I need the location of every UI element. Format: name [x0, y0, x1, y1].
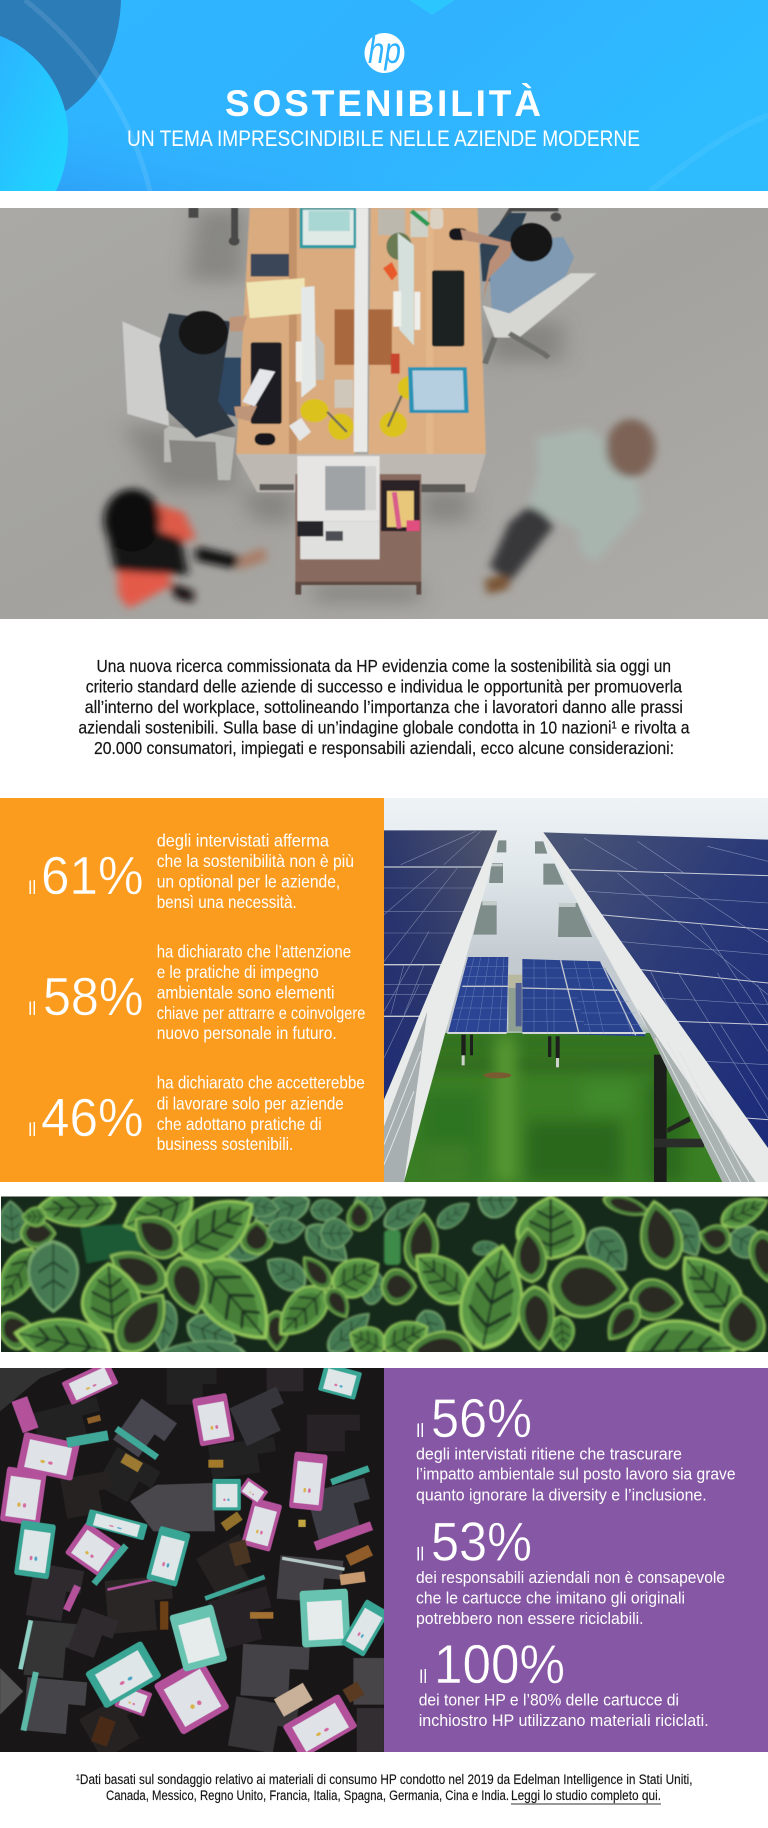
stat: 56%: quanto ignorare la diversity e l’inclusione. [416, 1485, 707, 1504]
intro paragraph: 20.000 consumatori, impiegati e responsabili aziendali, ecco alcune considerazioni: [94, 738, 674, 758]
stat: 61% [28, 830, 354, 912]
stat: 61%: 61% [41, 846, 144, 906]
intro paragraph: criterio standard delle aziende di successo e individua le opportunità per promuoverla [86, 676, 682, 696]
front-left solar panel [384, 830, 497, 1100]
black cartridge bodies [0, 1368, 384, 1760]
stat: 56%: l’impatto ambientale sul posto lavoro sia grave [416, 1465, 736, 1484]
meadow [384, 1033, 768, 1182]
photo: solar panels [384, 798, 768, 1182]
stat: 61%: degli intervistati afferma [157, 830, 329, 850]
woman bottom left [104, 489, 267, 609]
stat: 58% [28, 941, 365, 1043]
desk front [236, 454, 486, 492]
partition [354, 208, 368, 452]
stat: 100%: dei toner HP e l’80% delle cartucce di [419, 1690, 679, 1710]
stat: 56%: Il [416, 1421, 424, 1442]
stat: 56% [416, 1387, 736, 1504]
desk tops [236, 208, 355, 454]
pink cartridges [0, 1361, 373, 1759]
horizon strip [508, 975, 522, 988]
stat: 46% [28, 1073, 365, 1154]
man blurred right [485, 419, 655, 595]
header background [0, 0, 768, 191]
stat: 58%: 58% [43, 967, 144, 1027]
intro paragraph [78, 656, 690, 758]
footnote [76, 1772, 692, 1804]
subtitle: UN TEMA IMPRESCINDIBILE NELLE AZIENDE MODERNE [127, 126, 640, 151]
stat: 58%: chiave per attrarre e coinvolgere [157, 1003, 365, 1023]
rear posts [461, 1035, 560, 1058]
front-right rail and post [539, 832, 768, 1182]
leaves left half [1, 1196, 388, 1352]
photo: green leaves [1, 1196, 768, 1352]
stat: 61%: che la sostenibilità non è più [157, 851, 354, 871]
front-left rail [384, 830, 501, 1182]
lamps [300, 376, 410, 440]
stat: 58%: e le pratiche di impegno [157, 962, 319, 982]
front-right solar panel [543, 832, 768, 1148]
stat: 53%: dei responsabili aziendali non è consapevole [416, 1568, 725, 1587]
stat: 100% [419, 1633, 709, 1730]
panel: purple statistics [384, 1368, 768, 1752]
stat: 56%: degli intervistati ritiene che trascurare [416, 1444, 682, 1463]
printer table and tray [295, 474, 421, 583]
contact chips [87, 1415, 373, 1747]
stat: 46%: di lavorare solo per aziende [157, 1093, 344, 1113]
stat: 61%: un optional per le aziende, [157, 872, 340, 892]
chairs at top [189, 208, 561, 245]
stat: 46%: Il [28, 1120, 36, 1141]
stat: 100%: Il [419, 1667, 427, 1688]
stat: 53%: potrebbero non essere riciclabili. [416, 1609, 644, 1628]
stat: 53%: che le cartucce che imitano gli originali [416, 1588, 685, 1607]
stat: 53%: Il [416, 1545, 424, 1566]
intro paragraph: aziendali sostenibili. Sulla base di un’indagine globale condotta in 10 nazioni¹ e rivolta a [78, 717, 690, 737]
stat: 46%: che adottano pratiche di [157, 1114, 322, 1134]
stat: 58%: ambientale sono elementi [157, 982, 334, 1002]
teal cartridges [14, 1363, 389, 1731]
header banner [0, 0, 768, 191]
printer [297, 456, 380, 521]
icon: HP logo: hp [368, 30, 401, 71]
brackets [473, 840, 592, 937]
panel: orange statistics [0, 798, 384, 1182]
stat: 100%: 100% [434, 1633, 565, 1695]
stat: 46%: business sostenibili. [157, 1134, 293, 1154]
stat: 58%: ha dichiarato che l’attenzione [157, 941, 351, 961]
footnote: ¹Dati basati sul sondaggio relativo ai materiali di consumo HP condotto nel 2019 da Edelman Intelligence in Stati Uniti, [76, 1772, 692, 1787]
person left [122, 321, 169, 426]
leaves right half [379, 1196, 768, 1352]
desk items right [378, 209, 405, 235]
intro paragraph: Una nuova ricerca commissionata da HP evidenzia come la sostenibilità sia oggi un [96, 656, 671, 676]
stat: 61%: Il [28, 878, 36, 899]
stat: 58%: Il [28, 999, 36, 1020]
footnote: Leggi lo studio completo qui. [511, 1788, 661, 1803]
footnote: Canada, Messico, Regno Unito, Francia, Italia, Spagna, Germania, Cina e India. [106, 1788, 509, 1803]
stat: 46%: ha dichiarato che accetterebbe [157, 1073, 365, 1093]
intro paragraph: all’interno del workplace, sottolineando l’importanza che i lavoratori danno alle prassi [85, 697, 683, 717]
rear solar panels [447, 957, 646, 1036]
photo: office seen from above [0, 208, 768, 619]
stat: 53%: 53% [431, 1511, 532, 1573]
person top right [480, 213, 527, 281]
stat: 56%: 56% [431, 1387, 532, 1449]
desk items left [251, 254, 289, 276]
photo: ink cartridges [0, 1361, 389, 1760]
title: SOSTENIBILITÀ [225, 83, 541, 124]
stat: 58%: nuovo personale in futuro. [157, 1023, 337, 1043]
stat: 46%: 46% [41, 1088, 144, 1148]
floor shadows [122, 209, 563, 603]
stat: 61%: bensì una necessità. [157, 892, 297, 912]
stat: 100%: inchiostro HP utilizzano materiali riciclati. [419, 1711, 709, 1730]
stat: 53% [416, 1511, 725, 1628]
